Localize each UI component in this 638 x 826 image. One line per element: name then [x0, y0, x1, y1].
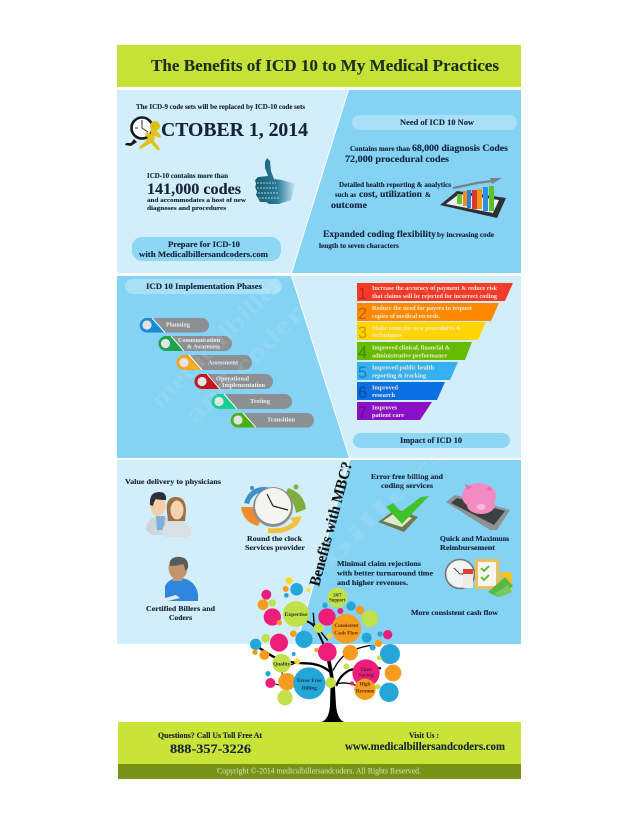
phase: assessment: Assessment [208, 360, 239, 366]
panel: need of ICD 10 now [292, 90, 521, 273]
impact 7: 7 [358, 403, 367, 422]
phase: testing [212, 394, 292, 409]
codes statement: diagnoses and procedures [147, 205, 227, 212]
phase: transition [231, 413, 314, 428]
impact 1: 1 [358, 284, 367, 303]
phase: operational implementation: Implementation [222, 382, 266, 389]
error free billing caption: coding services [381, 481, 433, 490]
impact 7: Improves [372, 404, 397, 412]
phase: operational implementation: Operational [216, 376, 249, 382]
coding flexibility text [319, 230, 494, 250]
certified billers caption [146, 604, 216, 622]
coding flexibility text: Expanded coding flexibility [323, 230, 436, 240]
impact 7: patient care [372, 412, 404, 419]
need pill: Need of ICD 10 Now [400, 118, 474, 127]
website contact: www.medicalbillersandcoders.com [345, 741, 505, 753]
impact 6: 6 [358, 383, 367, 402]
impact 2: copies of medical records. [372, 313, 440, 320]
coding flexibility text: length to seven characters [319, 243, 399, 250]
value delivery heading: Value delivery to physicians [125, 477, 221, 486]
phase: planning: Planning [166, 322, 191, 328]
phases pill [125, 279, 282, 294]
impact 3 [357, 322, 486, 342]
impact pill [353, 433, 510, 448]
prepare pill: Prepare for ICD-10 [168, 240, 240, 249]
bubble: time saving: Saving [358, 673, 374, 679]
bubble: 24/7 support [327, 588, 347, 608]
icon: green check [378, 496, 429, 532]
codes statement: and accommodates a host of new [147, 197, 246, 204]
bubble: expertise: Expertise [285, 612, 308, 618]
impact 5: Improved public health [372, 364, 434, 372]
bubble: time saving: Time [360, 667, 372, 673]
phases pill: ICD 10 Implementation Phases [146, 282, 262, 291]
icon: round the clock [241, 484, 306, 533]
diagnosis codes text: 68,000 diagnosis Codes [412, 143, 508, 154]
impact 2 [357, 303, 499, 323]
analytics text: cost, utilization [359, 190, 423, 200]
panel: implementation phases [117, 276, 349, 458]
website contact [345, 731, 505, 753]
codes statement [147, 172, 246, 212]
icon: digital thumbs up [254, 158, 295, 204]
phone contact: 888-357-3226 [170, 742, 251, 756]
phase: communication and awareness: & Awareness [187, 344, 221, 350]
impact pill: Impact of ICD 10 [400, 436, 462, 445]
icon: piggy bank on calculator [446, 483, 510, 530]
diagnosis codes text: 72,000 procedural codes [345, 154, 449, 165]
bubble: high revenue: High [360, 683, 370, 688]
reimbursement caption [440, 534, 510, 552]
round the clock caption: Round the clock [247, 534, 303, 543]
icon: running clock man [125, 118, 161, 150]
impact 6 [357, 382, 445, 402]
impact 4 [357, 342, 472, 362]
impact 1 [357, 283, 513, 303]
bubbles [250, 577, 401, 705]
impact 3: 3 [358, 323, 367, 342]
impact 3: Make room for new procedures & [372, 325, 462, 332]
phase: transition: Transition [267, 416, 296, 424]
impact 4: 4 [358, 343, 367, 362]
deadline intro text: The ICD-9 code sets will be replaced by ICD-10 code sets [136, 103, 305, 111]
bubble: consistent cash flow: Cash Flow [334, 630, 359, 636]
reimbursement caption: Reimbursement [440, 543, 496, 552]
impact 1: that claims will be rejected for incorrect coding [372, 293, 498, 300]
bubble: time saving [352, 659, 380, 687]
footer banner [118, 722, 521, 764]
header banner [117, 45, 521, 87]
bubble: 24/7 support: Support [329, 599, 346, 604]
phase: communication and awareness [159, 336, 232, 351]
impact 2: 2 [358, 304, 367, 323]
phase: communication and awareness: Communication [178, 337, 221, 344]
panel: October 2014 deadline [117, 90, 348, 273]
impact 7 [357, 402, 432, 422]
panel: value delivery right [297, 460, 521, 644]
phase: planning [140, 318, 209, 332]
impact funnel [357, 283, 513, 422]
bubble: consistent cash flow [332, 614, 361, 643]
watermark: billers [316, 435, 455, 574]
analytics text: & [425, 191, 431, 199]
reimbursement caption: Quick and Maximum [440, 534, 510, 543]
minimal claim rejections text [337, 559, 434, 587]
minimal claim rejections text: with better turnaround time [337, 568, 434, 578]
analytics text [331, 182, 451, 211]
phase: operational implementation [194, 374, 273, 389]
icon: tablet bar chart [440, 178, 506, 218]
icon: clock, checklist and money [446, 559, 513, 597]
bubble: quality: Quality [273, 661, 291, 667]
prepare pill [132, 237, 281, 261]
analytics text: outcome [331, 201, 367, 211]
impact 3: techniques [372, 332, 403, 339]
watermark [145, 261, 455, 574]
certified billers caption: Coders [169, 613, 192, 622]
error free billing caption [371, 472, 444, 490]
codes statement: ICD-10 contains more than [147, 172, 228, 180]
impact 6: Improved [372, 384, 398, 392]
tree illustration [250, 577, 401, 722]
impact 4: administrative performance [372, 352, 447, 360]
bubble: error free billing: Error Free [297, 678, 322, 684]
website contact: Visit Us : [409, 731, 439, 740]
date heading: CTOBER 1, 2014 [161, 120, 308, 141]
coding flexibility text: by increasing code [437, 232, 494, 239]
phase: testing: Testing [250, 398, 271, 405]
diagnosis codes text: Contains more than [350, 146, 410, 153]
bubble: error free billing [293, 667, 325, 699]
error free billing caption: Error free billing and [371, 472, 444, 481]
impact 4: Improved clinical, financial & [372, 344, 451, 352]
analytics text: such as [335, 192, 356, 199]
title: The Benefits of ICD 10 to My Medical Practices [151, 56, 499, 75]
minimal claim rejections text: and higher revenues. [337, 578, 408, 587]
icon: doctors [146, 492, 191, 537]
icon: certified biller [158, 556, 198, 602]
watermark: and coders [180, 290, 320, 429]
bubble: consistent cash flow: Consistent [334, 623, 359, 629]
panel: value delivery left [117, 460, 349, 644]
copyright bar: Copyright ©-2014 medicalbillersandcoders. All Rights Reserved. [217, 766, 421, 776]
phase: assessment [177, 355, 252, 370]
prepare pill: with Medicalbillersandcoders.com [139, 250, 268, 259]
minimal claim rejections text: Minimal claim rejections [337, 559, 421, 568]
impact 1: Increase the accuracy of payment & reduce risk [372, 285, 497, 292]
impact 5: 5 [358, 363, 367, 382]
impact 6: research [372, 392, 395, 399]
codes statement: 141,000 codes [147, 181, 241, 198]
diagnosis codes text [345, 143, 508, 165]
round the clock caption [245, 534, 306, 552]
impact 2: Reduce the need for payers to request [372, 305, 473, 312]
bubble: high revenue [354, 679, 376, 700]
panel: impact of ICD 10 [292, 276, 521, 458]
bubble: 24/7 support: 24/7 [333, 593, 342, 598]
bubble: quality [272, 654, 291, 673]
bubble: high revenue: Revenue [356, 690, 375, 695]
watermark: medicalbillers [145, 261, 299, 414]
rotated heading: Benefits with MBC?: Benefits with MBC? [306, 460, 356, 588]
certified billers caption: Certified Billers and [146, 604, 216, 613]
need pill [352, 115, 517, 130]
impact 5: reporting & tracking [372, 372, 427, 380]
tree trunk and branches [260, 613, 380, 722]
analytics text: Detailed health reporting & analytics [339, 182, 451, 189]
round the clock caption: Services provider [245, 543, 306, 552]
cash flow caption: More consistent cash flow [411, 608, 499, 617]
bubble: expertise [283, 601, 309, 627]
phone contact: Questions? Call Us Toll Free At [158, 731, 262, 740]
phone contact [158, 731, 262, 756]
copyright bar [118, 764, 521, 779]
impact 5 [357, 362, 458, 382]
bubble: error free billing: Billing [302, 685, 317, 691]
